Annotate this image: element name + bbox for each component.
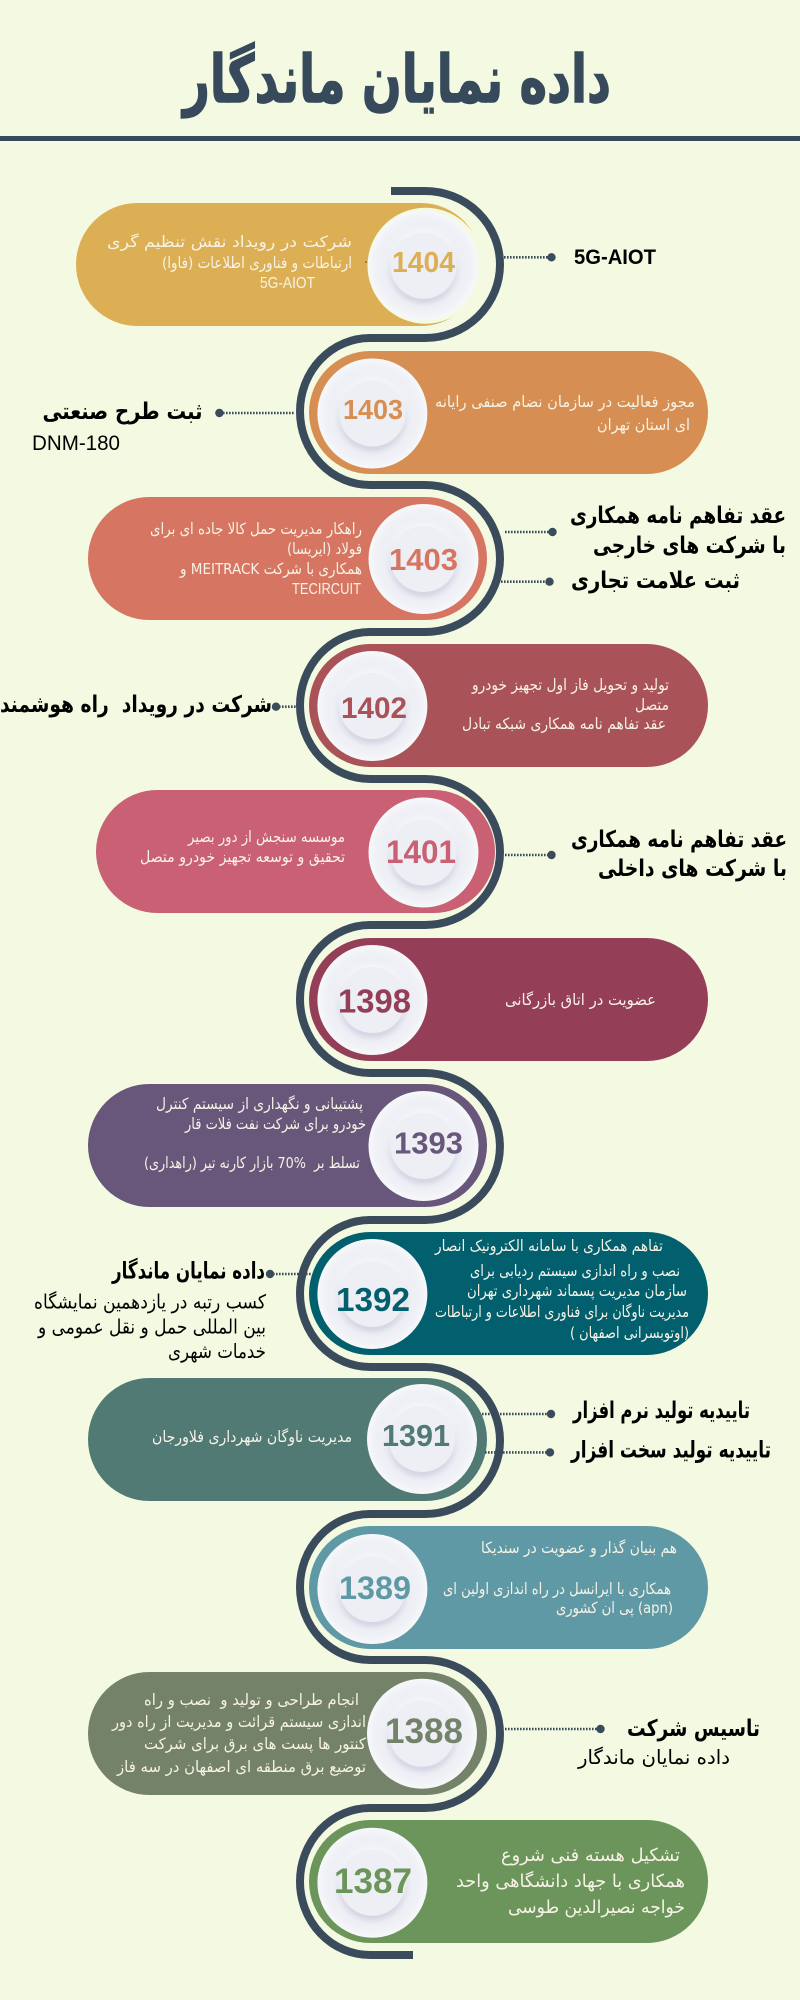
text 1388: اندازی سیستم قرائت و مدیریت از راه دور (111, 1713, 366, 1732)
text 1403 (435, 393, 695, 435)
text 1387: خواجه نصیرالدین طوسی (508, 1897, 685, 1918)
year 1402: 1402 (341, 692, 407, 725)
text 1403: راهکار مدیریت حمل کالا جاده ای برای (150, 520, 362, 538)
callout: exhibition rank (34, 1258, 311, 1363)
text 1392: سازمان مدیریت پسماند شهرداری تهران (467, 1282, 687, 1301)
text 1387 (456, 1845, 685, 1918)
text 1402: متصل (635, 696, 669, 714)
title: داده نمایان ماندگار (181, 41, 611, 118)
text 1404: 5G-AIOT (260, 275, 315, 292)
callout: company founding: داده نمایان ماندگار (577, 1746, 730, 1769)
panel: 1403 pill (orange) (309, 351, 708, 474)
callout: software approval (482, 1398, 750, 1424)
icon: 1398 disc (317, 945, 427, 1055)
year 1403: 1403 (389, 542, 458, 577)
text 1403: همکاری با شرکت MEITRACK و (179, 560, 362, 579)
text 1393: خودرو برای شرکت نفت فلات قار (184, 1115, 366, 1134)
panel: 1387 pill (309, 1820, 708, 1943)
text 1401: تحقیق و توسعه تجهیز خودرو متصل (140, 848, 345, 867)
text 1403 (150, 520, 362, 598)
text 1401 (140, 828, 345, 867)
text 1389: (apn) پی ان کشوری (556, 1599, 673, 1618)
text 1402: عقد تفاهم نامه همکاری شبکه تبادل (462, 715, 666, 733)
panel: 1402 pill (309, 644, 708, 767)
icon: 1393 disc (368, 1091, 478, 1201)
text 1402 (462, 676, 669, 733)
icon: 1403 disc (317, 358, 427, 468)
text 1393: تسلط بر %70 بازار کارنه تیر (راهداری) (144, 1154, 360, 1172)
year 1387: 1387 (334, 1862, 412, 1901)
text 1401: موسسه سنجش از دور بصیر (187, 828, 345, 847)
panel: 1392 pill (309, 1232, 708, 1355)
icon: 1392 disc (317, 1239, 427, 1349)
callout: smart road event: شرکت در رویداد راه هوشمند (0, 692, 272, 718)
text 1403: فولاد (ایریسا) (287, 540, 362, 558)
callout: industrial design registration: ثبت طرح صنعتی (42, 399, 202, 425)
text 1403: مجوز فعالیت در سازمان نضام صنفی رایانه (435, 393, 695, 411)
callout: domestic MoU (505, 827, 787, 882)
year 1388: 1388 (385, 1712, 463, 1751)
text 1392: تفاهم همکاری با سامانه الکترونیک انصار (434, 1237, 663, 1256)
panel: 1398 pill (309, 938, 708, 1061)
year 1391: 1391 (382, 1418, 450, 1453)
panel: 1391 pill (88, 1378, 487, 1501)
icon: 1402 disc (317, 651, 427, 761)
callout: industrial design registration: DNM-180 (32, 432, 120, 455)
text 1387: تشکیل هسته فنی شروع (501, 1845, 680, 1866)
callout: trademark (501, 568, 740, 594)
text 1392: (اوتوبسرانی اصفهان ) (570, 1324, 689, 1343)
icon: 1391 disc (367, 1384, 477, 1494)
callout: 5G-AIOT (504, 246, 656, 269)
text 1404: ارتباطات و فناوری اطلاعات (فاوا) (162, 254, 352, 273)
text 1388: کنتور ها پست های برق برای شرکت (144, 1735, 367, 1754)
callout: hardware approval (485, 1438, 771, 1464)
text 1392: نصب و راه اندازی سیستم ردیابی برای (470, 1262, 680, 1281)
timeline snake line (300, 191, 500, 1955)
year 1404: 1404 (392, 247, 455, 279)
text 1403: TECIRCUIT (292, 581, 361, 598)
text 1404 (107, 233, 352, 292)
callout: company founding: تاسیس شرکت (627, 1716, 760, 1742)
year 1393: 1393 (394, 1126, 463, 1160)
panel: 1393 pill (88, 1084, 487, 1207)
icon: 1387 disc (317, 1828, 427, 1938)
text 1387: همکاری با جهاد دانشگاهی واحد (456, 1870, 685, 1892)
callout: exhibition rank: کسب رتبه در یازدهمین نمایشگاه (34, 1290, 267, 1314)
text 1389: هم بنیان گذار و عضویت در سندیکا (481, 1539, 677, 1558)
year 1403: 1403 (343, 394, 403, 425)
text 1388: توضیع برق منطقه ای اصفهان در سه فاز (116, 1758, 366, 1777)
icon: 1401 disc (368, 798, 478, 908)
text 1388: انجام طراحی و تولید و نصب و راه (144, 1691, 359, 1710)
year 1392: 1392 (336, 1281, 410, 1318)
callout: industrial design registration (32, 399, 294, 455)
text 1402: تولید و تحویل فاز اول تجهیز خودرو (471, 676, 669, 695)
text 1393 (144, 1095, 366, 1172)
panel: 1389 pill (309, 1526, 708, 1649)
icon: 1403 disc (368, 504, 478, 614)
callout: company founding (505, 1716, 760, 1769)
icon: 1389 disc (317, 1534, 427, 1644)
icon: 1404 disc (368, 211, 478, 321)
title rule (0, 136, 800, 141)
callout: 5G-AIOT: 5G-AIOT (574, 246, 656, 269)
callout: exhibition rank: بین المللی حمل و نقل عمومی و (37, 1316, 266, 1339)
panel: 1388 pill (88, 1672, 487, 1795)
callout: exhibition rank: خدمات شهری (168, 1340, 266, 1363)
year 1401: 1401 (386, 834, 456, 870)
panel: 1401 pill (96, 790, 495, 913)
text 1393: پشتیبانی و نگهداری از سیستم کنترل (156, 1095, 363, 1114)
panel: 1404 pill (76, 203, 484, 326)
callout: exhibition rank: داده نمایان ماندگار (111, 1258, 265, 1284)
year 1389: 1389 (339, 1570, 411, 1606)
callout: trademark: ثبت علامت تجاری (571, 568, 740, 594)
text 1403: ای استان تهران (597, 416, 690, 435)
text 1398: عضویت در اتاق بازرگانی (505, 991, 656, 1009)
year 1398: 1398 (338, 982, 411, 1020)
callout: foreign MoU (505, 503, 786, 559)
text 1404: شرکت در رویداد نقش تنظیم گری (107, 233, 352, 252)
text 1389 (443, 1539, 677, 1618)
text 1391: مدیریت ناوگان شهرداری فلاورجان (152, 1428, 352, 1447)
text 1388 (111, 1691, 367, 1777)
text 1389: همکاری با ایرانسل در راه اندازی اولین ای (443, 1580, 671, 1599)
panel: 1403 pill (coral) (88, 497, 487, 620)
icon: 1388 disc (367, 1679, 477, 1789)
text 1392: مدیریت ناوگان برای فناوری اطلاعات و ارتباطات (435, 1303, 689, 1322)
text 1392 (434, 1237, 689, 1343)
